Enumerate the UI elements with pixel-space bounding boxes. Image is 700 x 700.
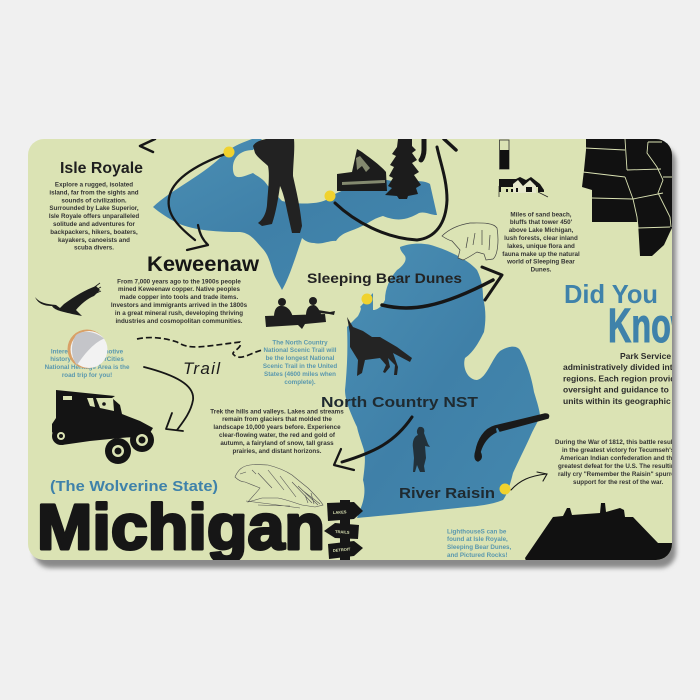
text: sleeping bear description [502, 211, 580, 274]
arrow: sleeping bear arrow [382, 267, 502, 308]
text: keweenaw description: Investors and immigrants arrived in the 1800s [111, 302, 248, 309]
heading: isle royale: Isle Royale [60, 160, 143, 177]
text: north country trail note: be the longest National [266, 355, 335, 362]
text: sleeping bear description: Dunes. [531, 267, 552, 274]
icon: flintlock pistol [475, 414, 549, 461]
text: motorcities note: National Heritage Area is the [45, 364, 130, 371]
arrow: isle royale arrow [140, 139, 228, 250]
text: park service: oversight and guidance to [563, 385, 669, 395]
icon: pine tree [385, 139, 421, 199]
subtitle: the wolverine state: (The Wolverine State) [50, 478, 218, 495]
text: sleeping bear description: lush forests, clear inland [504, 235, 578, 242]
text: motorcities note [45, 348, 130, 379]
text: river raisin description: American Indian confederation and the [560, 455, 676, 462]
text: north country trail note: Scenic Trail in the United [263, 363, 337, 370]
text: north country trail note: States (4600 miles when [264, 371, 336, 378]
text: motorcities note: history? The MotorCities [50, 356, 124, 363]
map: upper peninsula [153, 139, 437, 290]
text: river raisin description: in the greatest victory for Tecumseh's [562, 447, 675, 454]
markers: yellow location dots [224, 146, 510, 494]
text: park service [563, 353, 672, 406]
text: trek description: remain from glaciers that molded the [222, 416, 332, 423]
text: lighthouses note: LighthouseS can be [447, 528, 507, 535]
text: north country trail note: National Scenic Trail will [264, 347, 337, 354]
text: keweenaw description: From 7,000 years ago to the 1900s people [117, 278, 241, 285]
text: north country trail note: The North Country [272, 339, 328, 346]
icon: lighthouse [499, 140, 548, 197]
text: isle royale description: island, far from the sights and [49, 189, 139, 196]
text: river raisin description: support for the rest of the war. [573, 479, 664, 486]
text: north country trail note: complete). [284, 379, 316, 386]
text: river raisin description: rally cry "Remember the Raisin" spurred [558, 471, 679, 478]
arrow: river raisin arrow [511, 472, 547, 490]
arrow: north country arrow [334, 417, 412, 470]
icon: hiker man [253, 139, 302, 233]
text: isle royale description [49, 182, 139, 252]
text: sleeping bear description: Miles of sand beach, [510, 211, 572, 218]
text: park service: regions. Each region provides [563, 373, 685, 383]
text: isle royale description: Isle Royale offers unparalleled [49, 213, 139, 220]
hanging hole [68, 330, 108, 368]
icon: howling wolf [347, 317, 412, 376]
icon: signpost: TRAILS [335, 529, 350, 535]
cutting board panel [28, 139, 696, 563]
text: park service: units within its geographic [563, 396, 671, 406]
text: river raisin description [555, 439, 682, 486]
map: lower peninsula [345, 244, 540, 518]
icon: wolverine sketch [235, 465, 323, 508]
text: lighthouses note: found at Isle Royale, [447, 536, 508, 543]
icon: signpost [324, 500, 363, 561]
icon: hiker woman [413, 427, 430, 472]
arrow: dashed trail [137, 338, 262, 357]
icon: ford model t car [52, 390, 154, 464]
text: trek description: Trek the hills and valleys. Lakes and streams [210, 408, 344, 415]
text: motorcities note: road trip for you! [62, 372, 112, 379]
icon: canoe with paddlers [265, 297, 335, 329]
text: sleeping bear description: above Lake Michigan, [509, 227, 574, 234]
text: trek description: autumn, a fairyland of snow, tall grass [220, 440, 334, 447]
arrow: keweenaw arrow [335, 139, 456, 240]
text: isle royale description: solitude and adventures for [53, 221, 136, 228]
heading: sleeping bear dunes: Sleeping Bear Dunes [307, 270, 462, 286]
text: isle royale description: backpackers, hikers, boaters, [50, 229, 138, 236]
title: michigan: Michigan [37, 491, 325, 563]
text: keweenaw description: in a great mineral rush, developing thriving [115, 310, 243, 317]
icon: cabin [337, 149, 387, 191]
text: trek description: clear-flowing water, the red and gold of [219, 432, 336, 439]
arrow: trail arrow [144, 367, 193, 431]
icon: fort silhouette [525, 503, 672, 561]
text: sleeping bear description: bluffs that tower 450' [510, 219, 573, 226]
text: lighthouses note: and Pictured Rocks! [447, 552, 507, 559]
text: park service: administratively divided into [563, 362, 678, 372]
heading: keweenaw: Keweenaw [147, 253, 260, 276]
text: lighthouses note: Sleeping Bear Dunes, [447, 544, 512, 551]
text: isle royale description: Surrounded by Lake Superior, [49, 205, 139, 212]
heading: north country nst: North Country NST [321, 394, 478, 411]
text: isle royale description: kayakers, canoeists and [58, 237, 130, 244]
text: keweenaw description: industries and cosmopolitan communities. [115, 318, 243, 325]
text: sleeping bear description: lakes, unique flora and [507, 243, 575, 250]
icon: bear outline [442, 223, 498, 260]
text: isle royale description: scuba divers. [74, 245, 114, 252]
text: isle royale description: Explore a rugged, isolated [55, 182, 133, 188]
text: keweenaw description [111, 278, 248, 325]
heading: river raisin: River Raisin [399, 485, 495, 502]
text: river raisin description: During the War of 1812, this battle resulted [555, 439, 682, 446]
heading: did you know [566, 284, 672, 343]
icon: signpost: DETROIT [333, 546, 351, 553]
text: sleeping bear description: fauna make up the natural [502, 251, 580, 258]
text: trek description: prairies, and distant horizons. [233, 448, 322, 455]
text: north country trail note [263, 339, 337, 386]
text: keweenaw description: made copper into tools and trade items. [120, 294, 238, 301]
text: sleeping bear description: world of Sleeping Bear [506, 259, 575, 266]
text: keweenaw description: mined Keweenaw copper. Native peoples [118, 286, 240, 293]
label: trail: Trail [183, 359, 221, 378]
text: park service: Park Service [620, 351, 671, 361]
icon: bald eagle [35, 283, 101, 316]
text: lighthouses note [447, 528, 512, 559]
text: motorcities note: Interested in automotive [51, 348, 124, 355]
heading: did you know: Did You [564, 279, 658, 309]
text: trek description: landscape 10,000 years before. Experience [213, 424, 341, 431]
map: neighbouring states [582, 139, 672, 256]
text: river raisin description: greatest defeat for the U.S. The resulting [558, 463, 679, 470]
icon: signpost: LAKES [333, 509, 347, 515]
text: trek description [210, 408, 344, 455]
text: isle royale description: sounds of civilization. [61, 197, 127, 204]
